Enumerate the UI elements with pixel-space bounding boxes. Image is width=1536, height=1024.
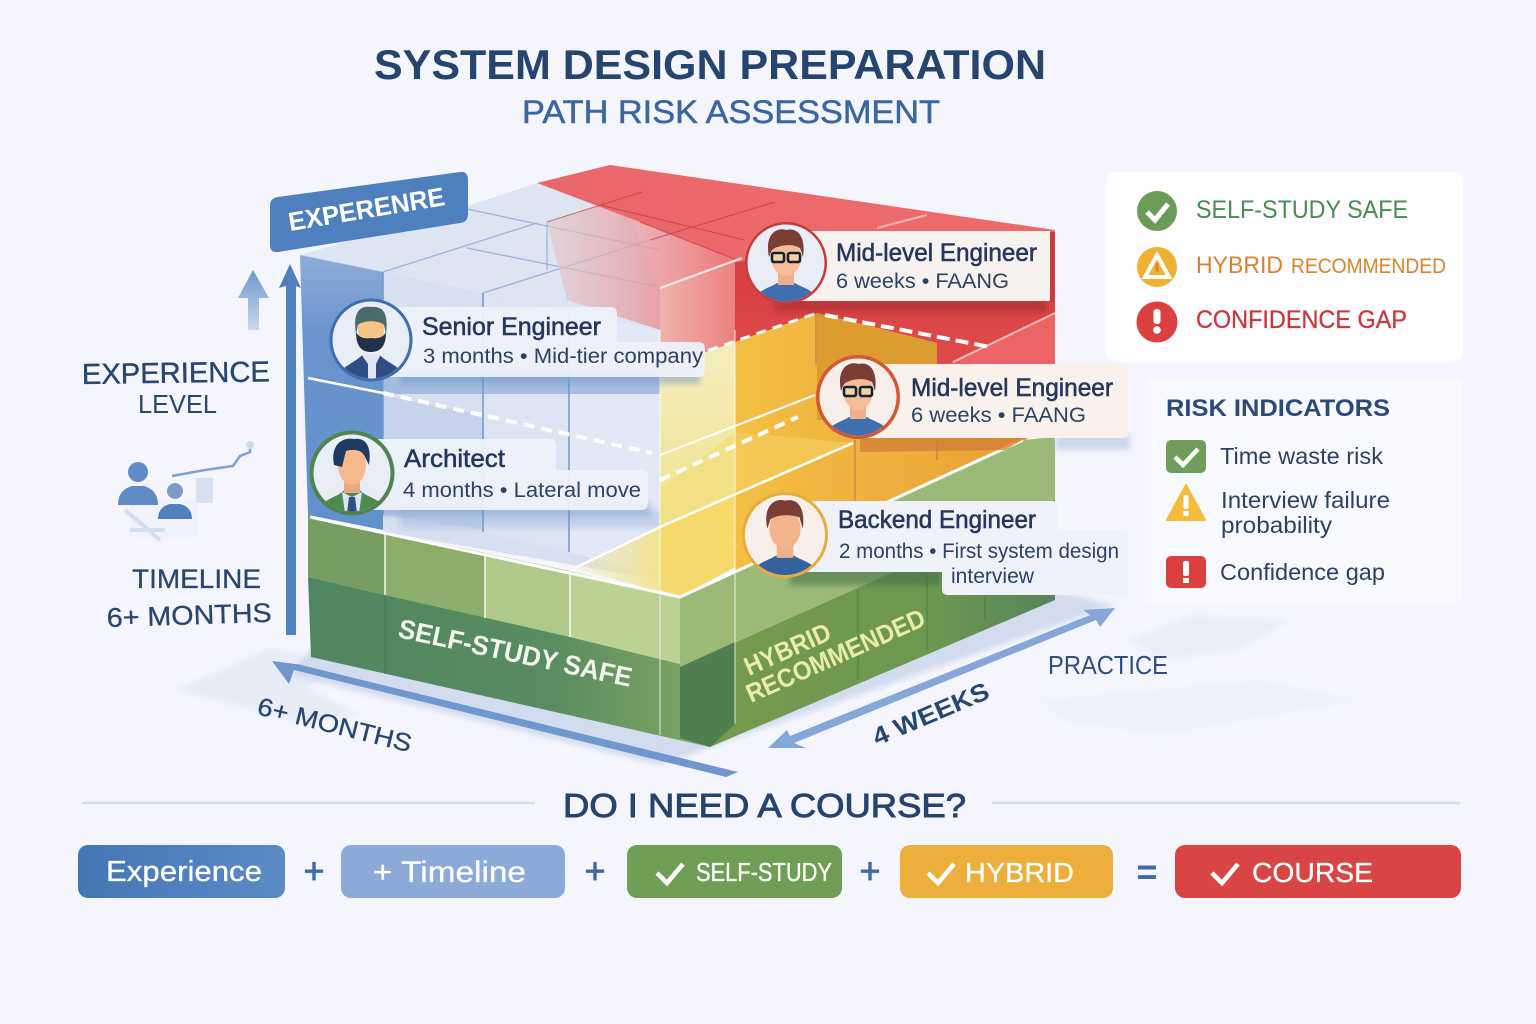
callout: mid-level engineer, orange zone xyxy=(816,355,1130,452)
callout: mid-level engineer, red zone: Mid-level Engineer xyxy=(836,239,1037,267)
legend text: confidence gap: CONFIDENCE GAP xyxy=(1196,306,1407,334)
callout: backend engineer: 2 months • First system design xyxy=(839,540,1119,563)
callout: senior engineer xyxy=(330,298,705,384)
axis arrow: bottom right, practice xyxy=(768,608,1115,748)
formula pill: self-study: SELF-STUDY xyxy=(696,857,832,887)
cube top face: red xyxy=(537,165,1055,262)
formula pill: course xyxy=(1175,845,1461,898)
callout: architect: Architect xyxy=(404,445,505,473)
left face: blue and glass columns xyxy=(300,255,383,530)
indicator: time waste risk: Time waste risk xyxy=(1220,443,1384,469)
callout: backend engineer xyxy=(742,492,1128,595)
right face: upper green band xyxy=(680,437,1055,667)
bottom axis label: 6+ months: 6+ MONTHS xyxy=(255,693,415,758)
right face: pale red column xyxy=(660,258,742,368)
icon: red alert xyxy=(1136,302,1178,342)
callout: architect: 4 months • Lateral move xyxy=(403,479,641,502)
experience level axis label xyxy=(82,356,270,419)
icon: green check xyxy=(1137,191,1177,231)
avatar: mid-level engineer 1 xyxy=(745,222,827,304)
right face: bright yellow lower xyxy=(660,495,735,597)
experience level axis label: EXPERIENCE xyxy=(82,356,270,391)
right face: orange zone xyxy=(735,313,1040,572)
right face: red zone xyxy=(735,232,1055,366)
callout: mid-level engineer, orange zone: 6 weeks • FAANG xyxy=(911,404,1086,427)
experience banner xyxy=(270,172,468,252)
top red grid xyxy=(547,192,775,300)
icon: check square xyxy=(1166,440,1206,473)
callout: senior engineer: 3 months • Mid-tier company xyxy=(423,345,704,368)
equals sign: = xyxy=(1136,851,1158,892)
legend text: self-study safe: SELF-STUDY SAFE xyxy=(1196,196,1408,224)
icon: warning triangle xyxy=(1167,485,1205,520)
panel: path legend xyxy=(1106,172,1463,362)
indicator: interview failure probability: probability xyxy=(1221,512,1333,538)
right face: pale yellow column xyxy=(660,342,735,597)
3D risk cube xyxy=(300,165,1055,747)
callout: senior engineer: Senior Engineer xyxy=(422,313,601,341)
formula pill: hybrid: HYBRID xyxy=(965,857,1074,888)
floor shadows xyxy=(175,590,1360,765)
self-study safe face label: SELF-STUDY SAFE xyxy=(396,614,635,693)
timeline axis label xyxy=(106,564,272,633)
practice axis label: PRACTICE xyxy=(1048,650,1168,680)
cube top face: light cells xyxy=(300,165,660,330)
right face: lower green band xyxy=(680,500,1055,747)
hybrid recommended face label: RECOMMENDED xyxy=(741,603,930,708)
experience banner: EXPERENRE xyxy=(286,181,447,237)
avatar: architect xyxy=(310,430,394,516)
callout: mid-level engineer, red zone xyxy=(745,222,1055,312)
icon: alert square xyxy=(1166,556,1206,588)
callout: mid-level engineer, red zone: 6 weeks • FAANG xyxy=(836,270,1009,293)
avatar: backend engineer xyxy=(742,492,828,578)
callout: architect xyxy=(310,430,650,516)
timeline axis label: TIMELINE xyxy=(132,564,261,594)
left face: upper green band xyxy=(308,515,385,595)
legend text: hybrid recommended: RECOMMENDED xyxy=(1291,255,1446,278)
avatar: mid-level engineer 2 xyxy=(816,355,900,439)
formula pill: experience xyxy=(78,845,285,898)
plus sign: + xyxy=(859,850,881,891)
cube structural lines xyxy=(308,215,1055,735)
bottom axis label: 4 weeks: 4 WEEKS xyxy=(868,677,993,752)
indicator: interview failure probability: Interview failure xyxy=(1221,487,1390,513)
legend text: hybrid recommended: HYBRID xyxy=(1196,252,1283,279)
title: SYSTEM DESIGN PREPARATION xyxy=(374,41,1046,88)
cube top grid xyxy=(383,209,660,552)
hybrid recommended face label: HYBRID xyxy=(739,617,835,681)
experience level axis label: LEVEL xyxy=(138,389,217,419)
callout: backend engineer: interview xyxy=(951,565,1035,588)
plus sign: + xyxy=(303,850,325,891)
indicator: interview failure probability xyxy=(1221,487,1390,538)
legend text: hybrid recommended xyxy=(1196,252,1446,279)
formula pill: experience: Experience xyxy=(106,856,262,888)
avatar: senior engineer xyxy=(330,298,412,382)
vertical experience axis arrow xyxy=(279,264,301,635)
formula pill: hybrid xyxy=(900,845,1113,898)
formula pill: timeline: + Timeline xyxy=(373,856,526,889)
icon: amber warning xyxy=(1137,247,1177,287)
formula pill: timeline xyxy=(341,845,565,898)
subtitle: PATH RISK ASSESSMENT xyxy=(522,94,940,130)
formula pill: course: COURSE xyxy=(1252,857,1373,888)
risk indicators heading: RISK INDICATORS xyxy=(1166,395,1390,422)
callout: backend engineer: Backend Engineer xyxy=(838,506,1036,534)
left face: lower dark green band xyxy=(308,577,710,747)
icon: engineers with pipeline xyxy=(118,441,254,540)
formula pill: self-study xyxy=(627,845,842,898)
cube top face: pink transition cells xyxy=(547,198,760,330)
panel: risk indicators xyxy=(1145,378,1462,604)
decision heading: DO I NEED A COURSE? xyxy=(563,787,966,824)
timeline axis label: 6+ MONTHS xyxy=(106,598,272,633)
plus sign: + xyxy=(584,850,606,891)
callout: mid-level engineer, orange zone: Mid-level Engineer xyxy=(911,374,1113,402)
axis arrow: bottom left, 6+ months xyxy=(272,661,738,777)
indicator: confidence gap: Confidence gap xyxy=(1220,559,1385,585)
small up arrow xyxy=(238,270,269,330)
